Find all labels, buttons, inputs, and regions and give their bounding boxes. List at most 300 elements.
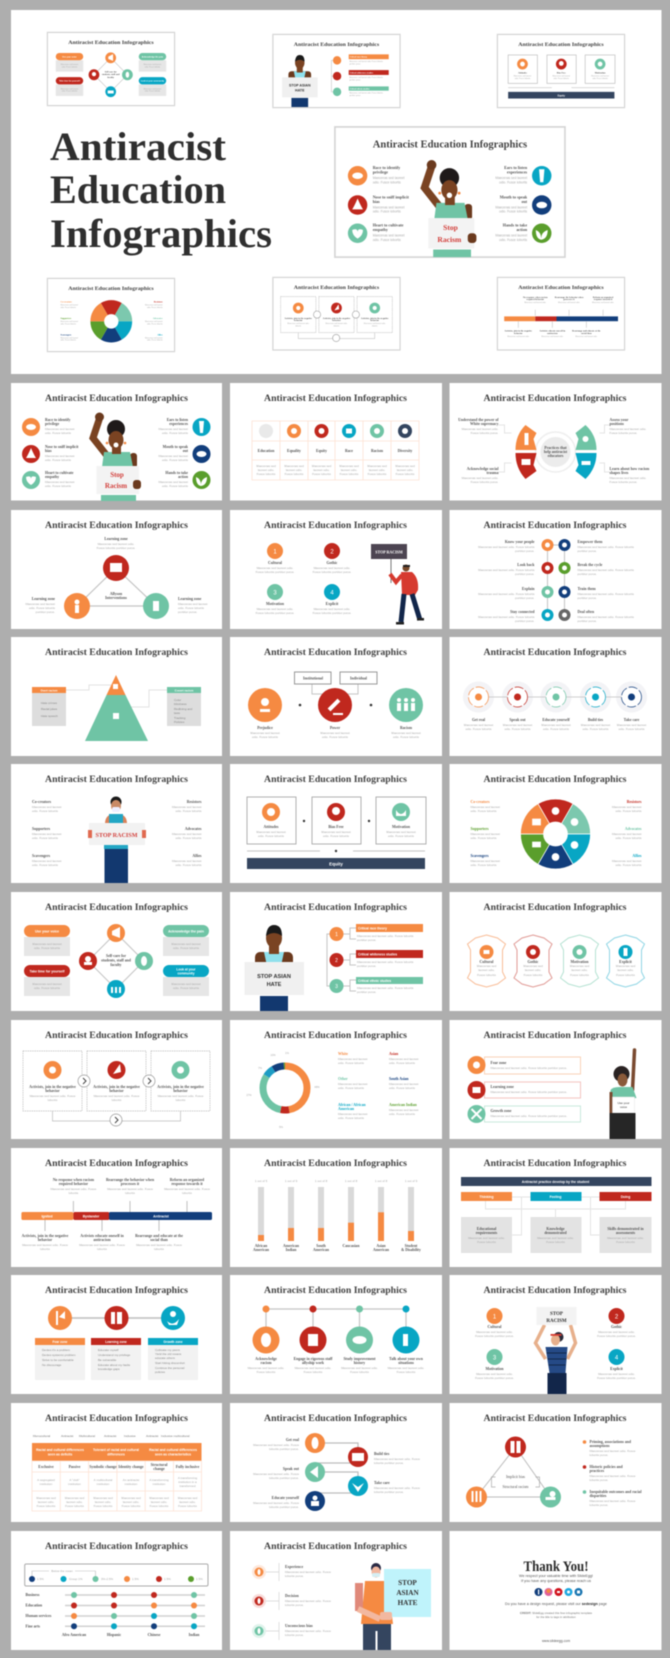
three boxes: Maecenas sed laoreet: [321, 830, 351, 834]
table: Education: [258, 449, 275, 453]
thumbnail: stop asian hate: Critical ethnic studies: [350, 87, 370, 90]
thumbnail: stop asian hate: Critical whiteness studies: [350, 71, 373, 74]
slide: equity equation boxes: [230, 764, 442, 883]
hero title: Antiracist: [50, 124, 227, 169]
numbered items: Maecenas sed laoreet odio.: [598, 1372, 635, 1376]
text above: [50, 1178, 210, 1195]
process boxes: behavior: [45, 1089, 60, 1093]
panel: hero cover: [11, 10, 662, 374]
table: Maecenas sed: [312, 464, 332, 468]
ring steps: [463, 682, 647, 712]
text blocks: Maecenas sed laoreet: [158, 480, 188, 484]
numbered items: Fusce lobortis porttitor purus.: [597, 1376, 636, 1380]
pill cards: Maecenas sed laoreet: [32, 982, 62, 986]
legend text: odio. Fusce lobortis: [389, 1112, 416, 1116]
text below: Maecenas sed laoreet odio. Fusce: [22, 1243, 68, 1247]
text below: Rearrange and educate at the: [135, 1234, 183, 1238]
figure: man with sign: [355, 1563, 431, 1650]
chain of circles: [542, 539, 570, 621]
thumbnail: dashed process: behavior: [294, 320, 303, 322]
legend text: South Asian: [389, 1077, 409, 1081]
table: Fusce lobortis: [285, 472, 304, 476]
table: laoreet odio.: [179, 1500, 196, 1504]
thumbnail: dashed process: lobortis: [372, 325, 378, 328]
wheel chart: [520, 799, 590, 869]
text blocks: odio. Fusce lobortis: [615, 809, 642, 813]
numbered items: Fusce lobortis porttitor purus.: [475, 1376, 514, 1380]
thumbnail: timeline: antiracism: [547, 333, 558, 335]
table: Fusce lobortis: [150, 1504, 169, 1508]
labels: odio. Fusce lobortis: [582, 727, 609, 731]
thumbnail: stop racism featured slide: empathy: [373, 227, 389, 232]
pill cards: odio. Fusce lobortis: [34, 946, 61, 950]
text blocks: lobortis porttitor purus.: [374, 1490, 404, 1494]
table: Race: [345, 449, 353, 453]
text blocks: [45, 418, 189, 488]
thumbnail: wheel: [47, 278, 175, 352]
bar chart: 1 out of 9: [285, 1179, 298, 1183]
pill cards: [24, 925, 209, 996]
slide title: Antiracist Education Infographics: [484, 775, 627, 785]
text above: No response when racism: [53, 1178, 95, 1182]
thumbnail: dashed process: [273, 277, 400, 350]
table: Identity change: [118, 1465, 144, 1469]
text blocks: porttitor purus.: [515, 619, 535, 623]
triangle diagram: [64, 555, 169, 619]
numbered items: Maecenas sed laoreet odio.: [598, 1330, 635, 1334]
table: Maecenas sed: [149, 1496, 169, 1500]
shield: gothic: laoreet odio.: [525, 968, 541, 972]
text blocks: [478, 540, 634, 623]
shield: cultural: Fusce lobortis: [477, 973, 496, 977]
slide title: Antiracist Education Infographics: [484, 903, 627, 913]
numbered circles: Fusce lobortis porttitor purus.: [313, 611, 352, 615]
thumbnail: stop racism featured slide: Stop: [443, 223, 458, 232]
slide: pyramid: [11, 637, 222, 756]
labels: Maecenas sed laoreet odio.: [341, 1366, 378, 1370]
figure: man with sign: ASIAN: [396, 1589, 419, 1597]
cards: Understand my privilege: [98, 1353, 131, 1357]
text blocks: Look back: [517, 563, 535, 567]
figure: woman with Stop Racism sign: Racism: [105, 482, 127, 490]
thank you heading: Thank You!: [524, 1559, 588, 1575]
table: Fusce lobortis: [396, 472, 415, 476]
table: Fusce lobortis: [257, 472, 276, 476]
list items: lobortis purus.: [285, 1633, 304, 1637]
text blocks: odio. Fusce lobortis: [45, 431, 72, 435]
percentage labels: [246, 1051, 320, 1129]
pill cards: odio. Fusce lobortis: [173, 946, 200, 950]
slide title: Antiracist Education Infographics: [264, 1286, 407, 1296]
shield: explicit: laoreet odio.: [617, 968, 634, 972]
thumbnail: timeline: Activists educate oneself in: [539, 329, 566, 332]
thumbnail: timeline: Reform an organized: [593, 296, 614, 299]
bar chart: South: [316, 1244, 327, 1248]
equation diagram: Maecenas sed laoreet: [391, 731, 421, 735]
labels: Maecenas sed laoreet odio.: [248, 1366, 285, 1370]
numbered items: 4: [615, 1356, 619, 1362]
text blocks: shapes lives: [610, 471, 629, 475]
list tree: Maecenas sed laoreet odio. Fusce lobortis: [357, 986, 414, 990]
right box: Tracking: [174, 716, 186, 720]
thumbnail: wheel: odio. Fusce lobortis: [61, 306, 76, 309]
thumbnail: wheel: Scavengers: [61, 333, 71, 336]
pill cards: community: [177, 972, 195, 976]
pill cards: odio. Fusce lobortis: [34, 986, 61, 990]
credit lines: for the title to tags in attribution: [536, 1615, 576, 1619]
text blocks: Race to identify: [45, 418, 71, 422]
bulleted text: Maecenas sed laoreet odio. Fusce: [590, 1449, 636, 1453]
thumbnail: wheel: Resistors: [154, 302, 163, 304]
thumbnail: equity formula: Motivation: [595, 73, 606, 75]
three boxes: odio. Fusce lobortis: [258, 834, 285, 838]
table: Maecenas sed: [121, 1496, 141, 1500]
left box: Racial jokes: [41, 707, 58, 711]
text blocks: odio. Fusce lobortis: [32, 836, 59, 840]
text blocks: Take care: [374, 1481, 390, 1485]
numbered items: Maecenas sed laoreet odio.: [476, 1330, 513, 1334]
text blocks: odio. Fusce lobortis: [162, 484, 188, 488]
thumbnail: self-care diamond: Maecenas sed laoreet: [144, 63, 162, 66]
hub diagram: Practices that: [544, 446, 567, 450]
slide title: Antiracist Education Infographics: [264, 1031, 407, 1041]
slide: hanging circles: [230, 1275, 442, 1394]
text blocks: porttitor purus.: [578, 619, 597, 623]
numbered circles: Fusce lobortis porttitor purus.: [313, 570, 352, 574]
thumbnail: equity formula: Equity: [558, 94, 566, 97]
text blocks: Heart to cultivate: [45, 471, 74, 475]
triangle cycle: Implicit bias: [506, 1475, 526, 1479]
text blocks: Maecenas sed laoreet: [45, 480, 75, 484]
text above: response towards it: [171, 1182, 203, 1186]
legend text: White: [338, 1052, 348, 1056]
text blocks: Nose to sniff implicit: [45, 445, 79, 449]
zone rows: [468, 1056, 580, 1123]
slide title: Antiracist Education Infographics: [264, 1414, 407, 1424]
table: Maecenas sed: [93, 1496, 113, 1500]
slide title: Antiracist Education Infographics: [484, 1031, 627, 1041]
thumbnail: stop racism featured slide: Heart to cultivate: [373, 223, 404, 228]
numbered items: Fusce lobortis porttitor purus.: [597, 1334, 636, 1338]
thumbnail: stop asian hate: Antiracist Education Infographics: [294, 42, 380, 48]
thumbnail: stop racism featured slide: Maecenas sed laoreet: [495, 176, 527, 180]
legend text: American: [338, 1107, 355, 1111]
thumbnail: stop racism featured slide: Race to identify: [373, 165, 401, 170]
shield: gothic: [514, 935, 552, 987]
text blocks: Maecenas sed laoreet: [32, 859, 62, 863]
list items: Maecenas sed laoreet odio. Fusce: [285, 1570, 331, 1574]
shield: gothic: Fusce lobortis: [524, 973, 543, 977]
text blocks: lobortis porttitor purus.: [269, 1447, 299, 1451]
thumbnail: equity formula: Attitudes: [518, 72, 527, 75]
table: Symbolic change: [89, 1465, 117, 1469]
rows of dots: Human services: [26, 1614, 52, 1618]
hero title: Infographics: [50, 211, 272, 256]
legend text: Maecenas sed laoreet: [389, 1108, 419, 1112]
thumbnail: wheel: Co-creators: [61, 302, 72, 304]
shield: gothic: Gothic: [528, 960, 539, 964]
process boxes: lobortis: [48, 1098, 58, 1102]
equation diagram: Racism: [400, 726, 413, 730]
figure: man with sign: [244, 925, 304, 1011]
labels: Fusce lobortis: [304, 1370, 323, 1374]
hierarchy diagram: Doing: [621, 1195, 630, 1199]
text blocks: lobortis porttitor purus.: [374, 1461, 404, 1465]
thumbnail: stop asian hate: STOP ASIAN: [289, 83, 311, 87]
text blocks: Maecenas sed laoreet: [25, 602, 55, 606]
top labels: Antiracist: [146, 1434, 159, 1438]
labels: Maecenas sed laoreet odio.: [388, 1366, 425, 1370]
thumbnail: wheel: odio. Fusce lobortis: [147, 322, 163, 325]
text above: required behavior: [59, 1182, 88, 1186]
labels: racism: [261, 1361, 272, 1365]
text above: lobortis: [69, 1191, 79, 1195]
slide title: Antiracist Education Infographics: [484, 1286, 627, 1296]
legend box: [25, 1564, 208, 1586]
text blocks: Maecenas sed laoreet: [45, 454, 75, 458]
text blocks: Resistors: [627, 800, 642, 804]
thumbnail: equity formula: Maecenas sed laoreet: [514, 75, 532, 78]
slide title: Antiracist Education Infographics: [45, 394, 188, 404]
process boxes: Maecenas sed laoreet odio. Fusce: [158, 1094, 204, 1098]
timeline bar: [21, 1201, 212, 1231]
bulleted text: practices: [590, 1469, 605, 1473]
three boxes: Attitudes: [264, 825, 279, 829]
thumbnail: stop asian hate: porttitor purus.: [349, 78, 361, 81]
text blocks: porttitor purus.: [178, 610, 198, 614]
hub diagram: help antiracist: [544, 450, 568, 454]
text blocks: Maecenas sed laoreet odio. Fusce: [253, 1472, 299, 1476]
figure: man with sign: HATE: [267, 982, 282, 988]
text blocks: Deal often: [578, 610, 595, 614]
text blocks: Assess your: [610, 418, 629, 422]
list tree: 1: [335, 932, 338, 938]
text above: Maecenas sed laoreet odio. Fusce: [50, 1187, 97, 1191]
thumbnail: stop racism featured slide: Ears to listen: [504, 165, 528, 170]
thumbnail: equity formula: odio. Fusce lobortis: [554, 77, 569, 80]
pyramid chart: [66, 675, 167, 741]
table: laoreet odio.: [397, 468, 413, 472]
text blocks: Stay connected: [510, 610, 535, 614]
legend text: odio. Fusce lobortis: [389, 1086, 416, 1090]
legend text: African / African: [338, 1103, 367, 1107]
table: Racial and cultural differences: [149, 1448, 197, 1452]
text below: social than: [150, 1238, 169, 1242]
timeline bar: Antiracist: [153, 1214, 170, 1218]
thumbnail: stop racism featured slide: odio. Fusce lobortis: [373, 238, 401, 242]
thumbnail: dashed process: Maecenas sed laoreet odio.: [364, 322, 386, 325]
text blocks: Maecenas sed laoreet odio. Fusce lobortis: [578, 568, 634, 572]
list items: Maecenas sed laoreet odio. Fusce: [285, 1629, 331, 1633]
table: transformed: [179, 1484, 196, 1488]
bulleted text: [583, 1440, 642, 1507]
list items: Decision: [285, 1594, 300, 1598]
numbered items: Gothic: [611, 1325, 622, 1329]
bar chart: 1 out of 5: [255, 1179, 268, 1183]
slide: person holding sign overhead: [450, 1275, 662, 1394]
equation diagram: Maecenas sed laoreet: [250, 731, 280, 735]
table: Fully inclusive: [176, 1465, 200, 1469]
equation diagram: Prejudice: [257, 726, 273, 730]
text blocks: Maecenas sed laoreet: [158, 427, 188, 431]
timeline bar: Bystander: [83, 1214, 100, 1218]
text blocks: Maecenas sed laoreet odio.: [462, 427, 499, 431]
thumbnail: stop asian hate: porttitor purus.: [349, 63, 361, 66]
text blocks: Fusce lobortis purus.: [610, 480, 638, 484]
thumbnail: self-care diamond: odio. Fusce lobortis: [145, 65, 160, 68]
bar chart: Caucasian: [343, 1244, 360, 1248]
legend text: Asian: [389, 1052, 399, 1056]
percentage labels: 5%: [279, 1125, 284, 1129]
labels: situations: [398, 1361, 414, 1365]
top labels: Antiracist: [104, 1434, 117, 1438]
numbered items: Cultural: [488, 1325, 501, 1329]
text blocks: Maecenas sed laoreet odio. Fusce lobortis: [478, 615, 535, 619]
text blocks: porttitor purus.: [515, 572, 535, 576]
numbered items: [475, 1308, 636, 1380]
table: institution in a: [178, 1480, 197, 1484]
slide title: Antiracist Education Infographics: [264, 1159, 407, 1169]
cards: Learning zone: [105, 1340, 127, 1344]
labels: Get real: [472, 718, 485, 722]
text blocks: [32, 800, 202, 867]
slide: dot matrix: [11, 1531, 222, 1650]
table: laoreet odio.: [95, 1500, 111, 1504]
thumbnail: timeline: Maecenas sed laoreet odio.: [575, 335, 598, 338]
hierarchy diagram: Fusce lobortis: [477, 1240, 496, 1244]
thumbnail: timeline: Rearrange and educate at the: [572, 329, 601, 332]
thumbnail: stop racism featured slide: odio. Fusce lobortis: [373, 180, 401, 184]
text above: processes it: [121, 1182, 140, 1186]
thumbnail: stop asian hate: Maecenas sed laoreet odio. Fusce lobortis: [349, 60, 383, 63]
three boxes: Maecenas sed laoreet: [256, 830, 286, 834]
legend text: odio. Fusce lobortis: [338, 1116, 365, 1120]
numbered circles: 4: [330, 590, 334, 596]
thank you message: [519, 1574, 593, 1583]
table: laoreet odio.: [286, 468, 302, 472]
text blocks: Maecenas sed laoreet odio. Fusce: [253, 1501, 299, 1505]
thumbnail: stop racism featured slide: privilege: [373, 170, 388, 175]
table: Maecenas sed: [178, 1496, 198, 1500]
thumbnail: timeline: No response when racism: [523, 297, 548, 299]
shield: cultural: Maecenas sed: [477, 964, 497, 968]
slide: man with Stop Asian Hate sign: [230, 1531, 442, 1650]
legend box: Group 1%: [69, 1577, 83, 1581]
shield: gothic: Maecenas sed: [523, 964, 543, 968]
thumbnail: stop asian hate: [273, 34, 400, 108]
table: Racial and cultural differences: [36, 1448, 84, 1452]
slide title: Antiracist Education Infographics: [484, 1159, 627, 1169]
equation diagram: [248, 672, 423, 739]
table: [252, 421, 419, 480]
right box: [167, 687, 201, 726]
slide: five step rings: [450, 637, 662, 756]
figure: woman with Stop Racism banner: STOP RACISM: [96, 832, 138, 839]
zone rows: Maecenas sed laoreet odio. Fusce lobortis porttitor purus.: [490, 1066, 567, 1070]
figure: woman raising fist: Use your: [617, 1101, 630, 1105]
text blocks: [25, 537, 208, 614]
figure: man with sign: STOP: [398, 1579, 417, 1587]
list tree: [327, 924, 423, 994]
legend box: Below the mean: [51, 1569, 73, 1573]
process boxes: [23, 1051, 210, 1121]
text blocks: Maecenas sed laoreet: [172, 859, 202, 863]
labels: Study improvement: [343, 1357, 376, 1361]
hierarchy diagram: Thinking: [479, 1195, 494, 1199]
numbered items: Motivation: [486, 1367, 504, 1371]
text blocks: Maecenas sed laoreet odio. Fusce lobortis: [478, 545, 535, 549]
text below: lobortis: [154, 1247, 164, 1251]
numbered items: Maecenas sed laoreet odio.: [476, 1372, 513, 1376]
website: www.slideegg.com: [542, 1639, 570, 1643]
diamond diagram: [79, 924, 153, 998]
text blocks: odio. Fusce lobortis: [615, 863, 642, 867]
table: Tolerant of racial and cultural: [93, 1448, 139, 1452]
text blocks: porttitor purus.: [36, 610, 55, 614]
triangle cycle: [466, 1436, 561, 1508]
text blocks: Advocates: [625, 827, 642, 831]
slide: zones with woman: [450, 1020, 662, 1139]
numbered items: 3: [493, 1356, 497, 1362]
text blocks: Fusce lobortis purus.: [471, 431, 499, 435]
labels: Maecenas sed laoreet: [581, 723, 610, 727]
labels: Fusce lobortis: [350, 1370, 369, 1374]
hierarchy diagram: [461, 1177, 652, 1253]
thumbnail: equity formula: Antiracist Education Infographics: [518, 42, 605, 48]
hierarchy diagram: Educational: [477, 1227, 496, 1231]
numbered circles: Maecenas sed laoreet odio.: [314, 566, 351, 570]
bar chart: American: [373, 1248, 390, 1252]
thumbnail: self-care diamond: Use your voice: [62, 56, 78, 59]
numbered circles: Fusce lobortis porttitor purus.: [256, 611, 295, 615]
hierarchy diagram: demonstrated: [544, 1231, 568, 1235]
pill cards: Take time for yourself: [30, 970, 65, 974]
pill cards: Maecenas sed laoreet: [171, 982, 201, 986]
hierarchy diagram: Maecenas sed laoreet odio.: [607, 1236, 644, 1240]
thumbnail: dashed process: Activists, join in the negative: [361, 317, 389, 320]
percentage labels: 1%: [285, 1051, 290, 1055]
figure: person with Stop Racism sign: STOP: [550, 1312, 563, 1317]
thumbnail: stop racism featured slide: action: [516, 227, 528, 232]
figure: person with Stop Racism sign: [536, 1307, 576, 1394]
text blocks: odio. Fusce lobortis: [45, 458, 72, 462]
text blocks: porttitor purus.: [515, 596, 535, 600]
thumbnail: dashed process: Maecenas sed laoreet odio.: [326, 322, 348, 325]
percentage labels: 48%: [314, 1085, 320, 1089]
table: laoreet odio.: [66, 1500, 83, 1504]
text blocks: Maecenas sed laoreet odio.: [98, 542, 135, 546]
figure: woman with Stop Racism sign: Stop: [110, 471, 124, 479]
thumbnail: stop racism featured slide: Maecenas sed laoreet: [495, 205, 527, 209]
credit lines: CREDIT: SlideEgg created this free infographic template: [520, 1611, 592, 1615]
text blocks: Maecenas sed laoreet odio. Fusce lobortis: [478, 568, 535, 572]
slide title: Antiracist Education Infographics: [264, 1542, 407, 1552]
cards: Yield the old means: [155, 1352, 182, 1356]
thumbnail: stop asian hate: Maecenas sed laoreet odio. Fusce lobortis: [349, 92, 383, 95]
bulleted text: lobortis purus.: [590, 1478, 609, 1482]
design request line: Do you have a design request, please visit our sedesign page: [505, 1602, 607, 1606]
thumbnail: timeline: required behavior: [527, 298, 544, 301]
slide title: Antiracist Education Infographics: [45, 521, 188, 531]
legend text: [338, 1052, 419, 1120]
shield: cultural: [468, 935, 506, 987]
list tree: 2: [335, 958, 338, 964]
text blocks: Maecenas sed laoreet: [470, 805, 500, 809]
hub diagram: [498, 425, 610, 479]
thumbnail: timeline: Antiracist Education Infographics: [518, 285, 605, 291]
table: Passive: [69, 1465, 81, 1469]
thumbnail: timeline: Maecenas sed laoreet odio.: [524, 301, 547, 304]
